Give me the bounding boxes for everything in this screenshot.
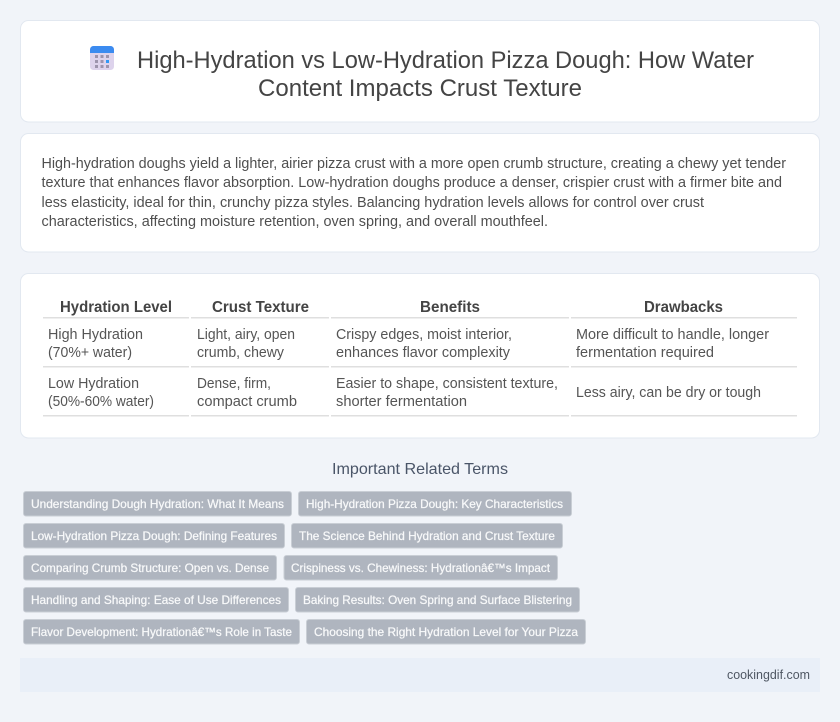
text block: intro paragraph: less elasticity, ideal for thin, crunchy pizza styles. Balancing hydration levels allows for control over crust bbox=[42, 195, 704, 211]
tag: comparing crumb structure bbox=[24, 556, 276, 580]
table row: high hydration: High Hydration bbox=[48, 327, 143, 343]
table row: low hydration: Dense, firm, bbox=[197, 376, 271, 392]
title: High-Hydration vs Low-Hydration Pizza Dough: How Water bbox=[137, 47, 754, 74]
tag: science behind hydration bbox=[292, 524, 562, 548]
table row: low hydration: Less airy, can be dry or tough bbox=[576, 385, 761, 401]
table header row: Hydration Level bbox=[60, 299, 172, 316]
text block: intro paragraph bbox=[42, 156, 786, 230]
table row: high hydration: fermentation required bbox=[576, 345, 714, 361]
tag: flavor development bbox=[24, 620, 300, 644]
title: Content Impacts Crust Texture bbox=[258, 75, 582, 102]
table row: high hydration: Light, airy, open bbox=[197, 327, 295, 343]
text block: intro paragraph: texture that enhances flavor absorption. Low-hydration doughs produce a denser, crispier crust with a firmer bite and bbox=[42, 175, 782, 191]
tag: high-hydration characteristics bbox=[298, 492, 572, 516]
text block: intro paragraph: characteristics, affecting moisture retention, oven spring, and overall mouthfeel. bbox=[42, 214, 548, 230]
tag: science behind hydration: The Science Behind Hydration and Crust Texture bbox=[299, 529, 555, 543]
table header row: Benefits bbox=[420, 299, 480, 316]
tag: low-hydration features: Low-Hydration Pizza Dough: Defining Features bbox=[31, 529, 277, 543]
panel: comparison table bbox=[20, 274, 820, 438]
table row: high hydration: (70%+ water) bbox=[48, 345, 132, 361]
table row: low hydration bbox=[43, 376, 797, 416]
tag: baking results bbox=[296, 588, 580, 612]
table row: low hydration: compact crumb bbox=[197, 394, 297, 410]
tag: low-hydration features bbox=[24, 524, 284, 548]
table row: high hydration: Crispy edges, moist interior, bbox=[336, 327, 512, 343]
table row: low hydration: Low Hydration bbox=[48, 376, 139, 392]
panel: title header bbox=[20, 20, 820, 122]
table header row: Crust Texture bbox=[212, 299, 309, 316]
tag: choosing the right hydration bbox=[306, 620, 586, 644]
table row: high hydration bbox=[43, 327, 797, 368]
tag: understanding dough hydration: Understanding Dough Hydration: What It Means bbox=[31, 497, 284, 511]
table row: high hydration: crumb, chewy bbox=[197, 345, 285, 361]
table row: low hydration: shorter fermentation bbox=[336, 394, 467, 410]
footer: cookingdif.com bbox=[727, 667, 810, 682]
panel: related term tags bbox=[24, 492, 586, 644]
table row: low hydration: (50%-60% water) bbox=[48, 394, 154, 410]
panel: introduction bbox=[20, 134, 820, 252]
tag: understanding dough hydration bbox=[24, 492, 292, 516]
table row: high hydration: More difficult to handle, longer bbox=[576, 327, 769, 343]
tag: handling and shaping: Handling and Shaping: Ease of Use Differences bbox=[31, 593, 281, 607]
tag: comparing crumb structure: Comparing Crumb Structure: Open vs. Dense bbox=[31, 561, 269, 575]
tag: handling and shaping bbox=[24, 588, 288, 612]
tag: baking results: Baking Results: Oven Spring and Surface Blistering bbox=[303, 593, 572, 607]
icon: calendar bbox=[90, 46, 114, 70]
tag: high-hydration characteristics: High-Hydration Pizza Dough: Key Characteristics bbox=[306, 497, 563, 511]
table row: high hydration: enhances flavor complexity bbox=[336, 345, 511, 361]
table header row bbox=[43, 299, 797, 318]
tag: choosing the right hydration: Choosing the Right Hydration Level for Your Pizza bbox=[314, 625, 578, 639]
tag: crispiness vs chewiness: Crispiness vs. Chewiness: Hydrationâ€™s Impact bbox=[291, 561, 551, 575]
text block: intro paragraph: High-hydration doughs yield a lighter, airier pizza crust with a more open crumb structure, creating a chewy yet tender bbox=[42, 156, 786, 172]
tag: flavor development: Flavor Development: Hydrationâ€™s Role in Taste bbox=[31, 625, 292, 639]
heading: important related terms: Important Related Terms bbox=[332, 461, 508, 478]
table row: low hydration: Easier to shape, consistent texture, bbox=[336, 376, 558, 392]
footer bbox=[20, 658, 820, 692]
title bbox=[137, 47, 754, 102]
tag: crispiness vs chewiness bbox=[284, 556, 558, 580]
table header row: Drawbacks bbox=[644, 299, 723, 316]
